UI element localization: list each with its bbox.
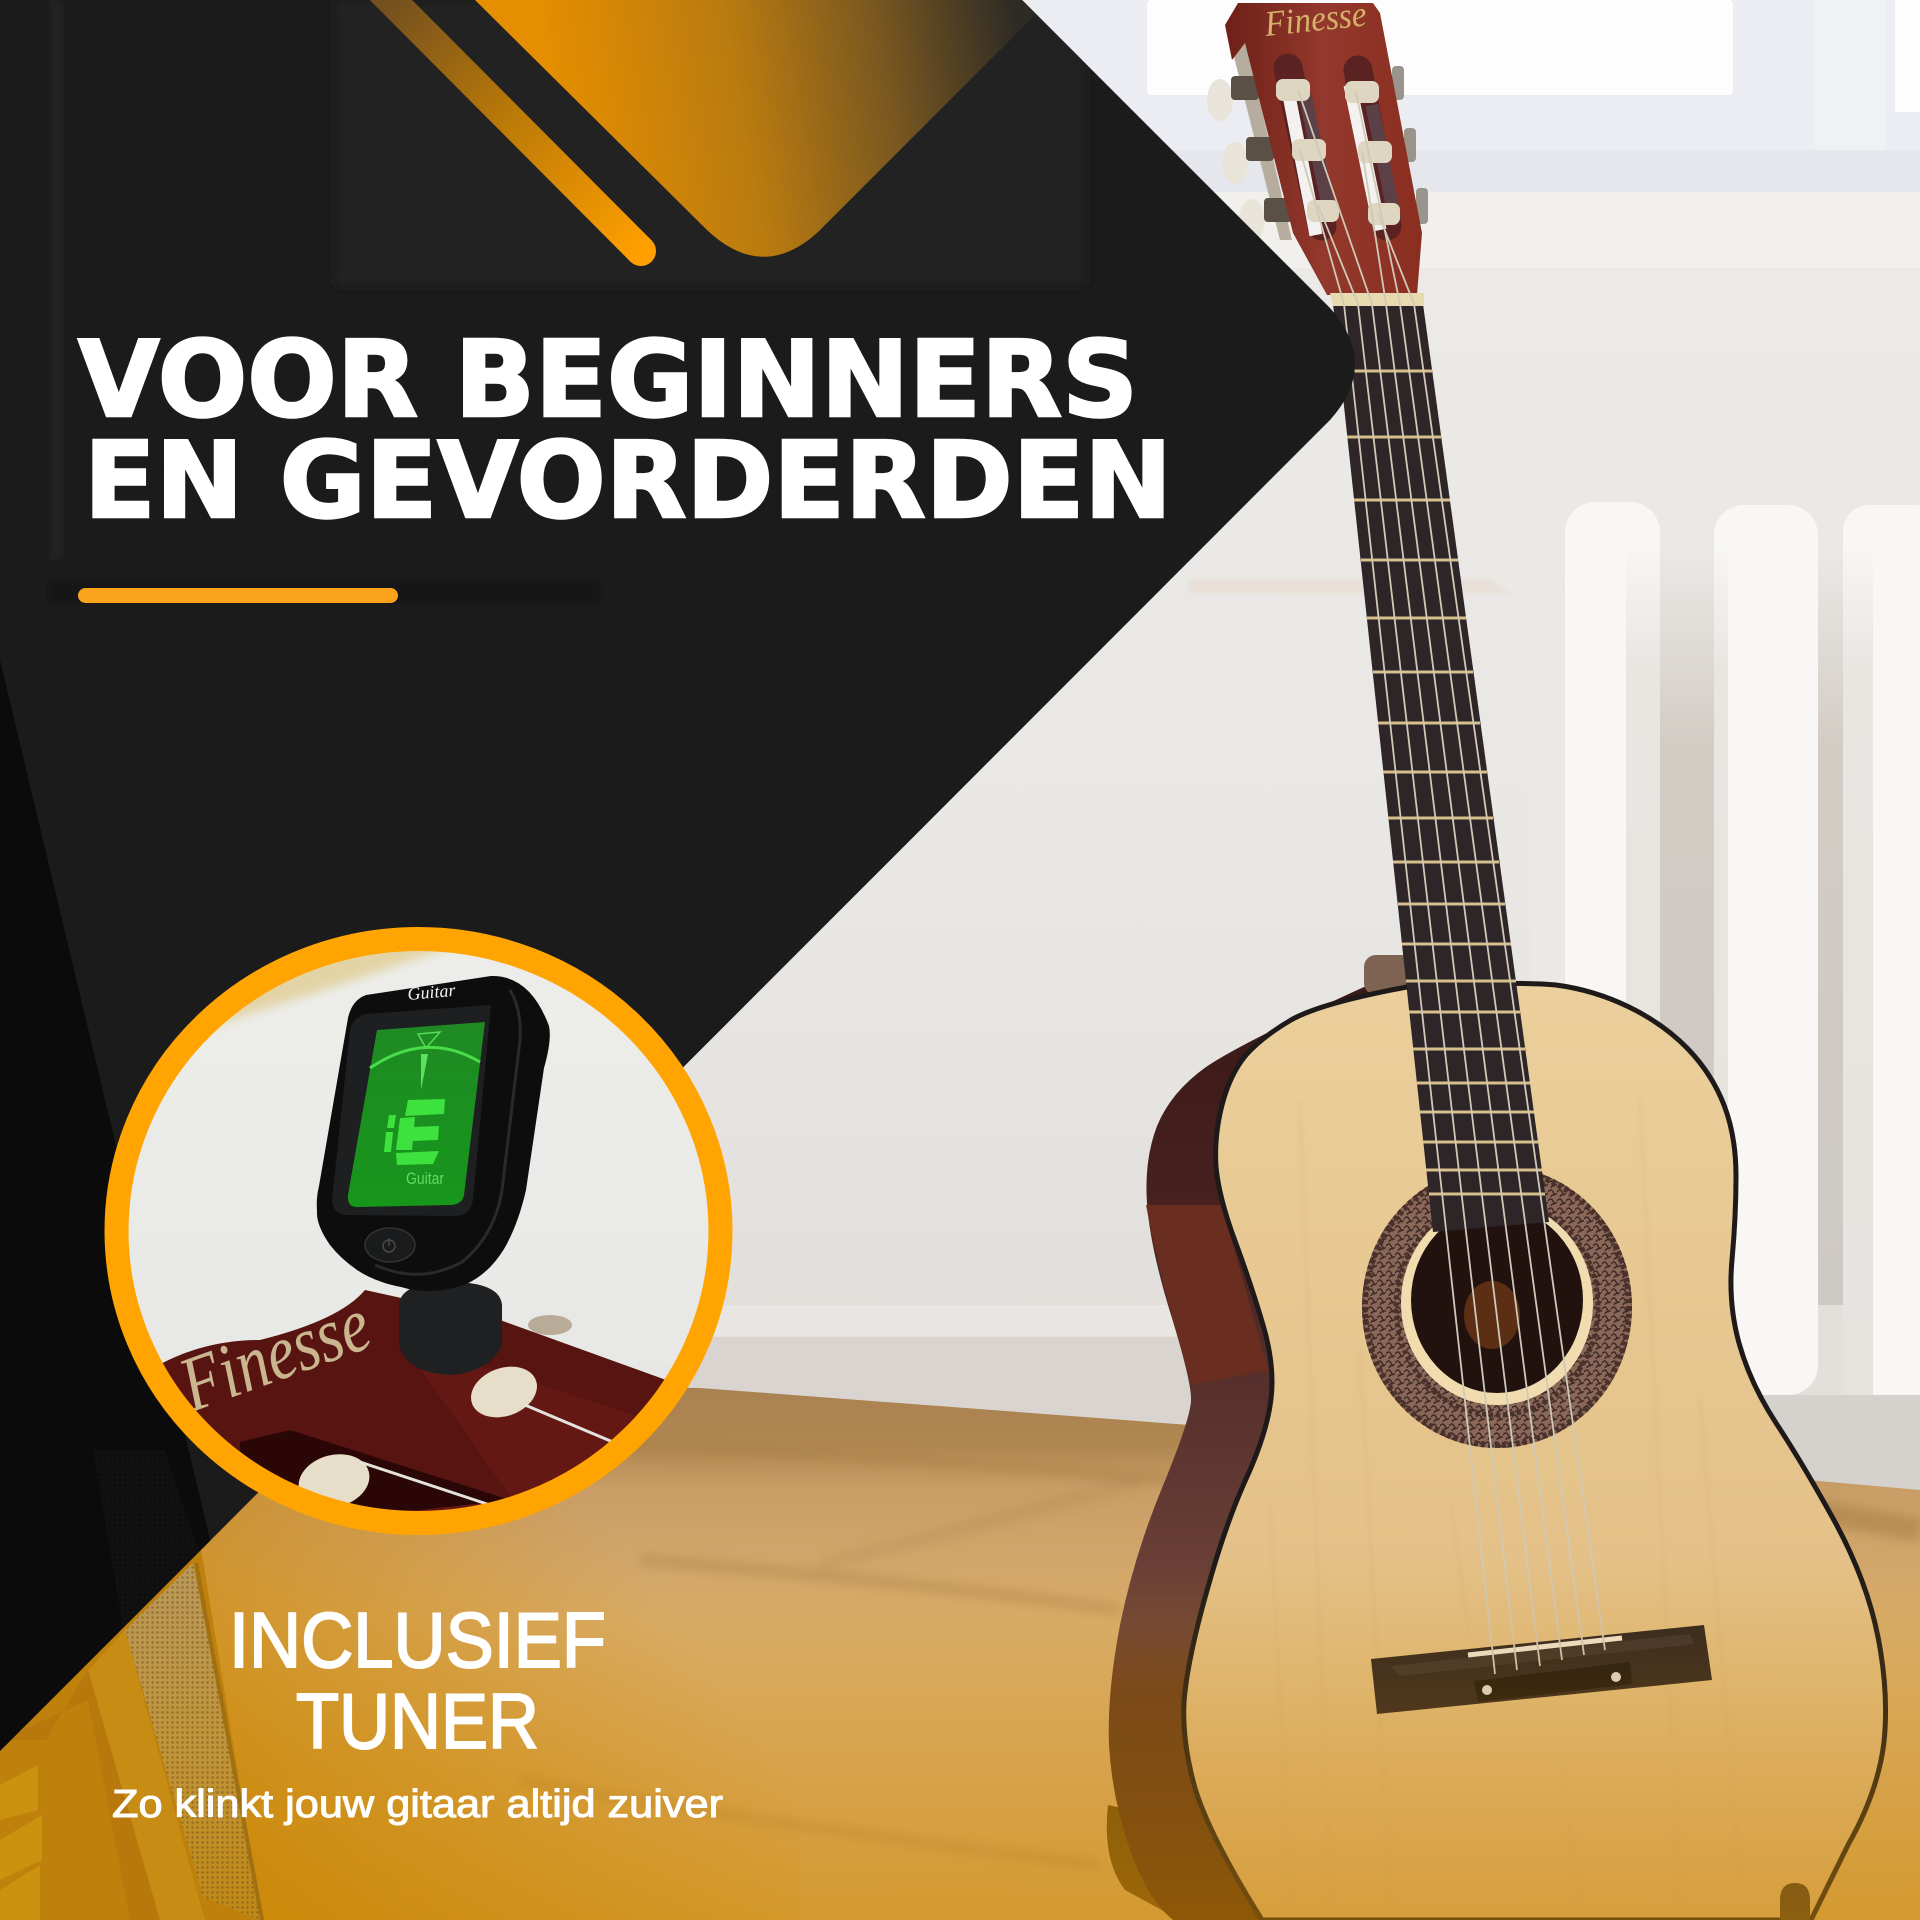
tuner note letter (384, 1099, 445, 1165)
tuner bezel (332, 1005, 491, 1216)
headstock (1207, 0, 1428, 295)
case dark orange body (0, 1500, 262, 1920)
heading (78, 319, 1172, 542)
mesh strip (125, 1563, 260, 1920)
nut (1330, 293, 1424, 306)
sound hole (1401, 1201, 1593, 1405)
power button (365, 1228, 415, 1262)
floor and body colour overlays (0, 1450, 1920, 1920)
tuner pegs (471, 1366, 537, 1418)
tuner heading: INCLUSIEF (229, 1596, 606, 1684)
tuner rollers (1276, 79, 1400, 225)
orange diagonal bar (371, 0, 641, 251)
guitar case at left edge (0, 1500, 262, 1920)
peg shaft (240, 1430, 505, 1511)
radiator (1480, 502, 1920, 1430)
wood grain (1270, 1100, 1740, 1910)
heading: VOOR BEGINNERS (78, 319, 1138, 441)
guitar side wood (1109, 985, 1420, 1920)
neck heel (1364, 955, 1414, 995)
tuner brand: Guitar (407, 980, 457, 1004)
wooden floor (0, 1380, 1920, 1920)
dark panel background textures (0, 0, 1085, 1770)
tuner circle photo (100, 920, 740, 1560)
orange ring (116, 939, 720, 1523)
circle photo content (128, 951, 708, 1511)
red headstock (162, 1290, 664, 1511)
guitar top face (1184, 983, 1886, 1920)
guitar stand peg (1780, 1883, 1810, 1920)
tuner edge highlight (375, 990, 520, 1274)
tuner heading (229, 1596, 606, 1765)
case lighter steps (0, 1765, 42, 1920)
tuner arc (370, 1047, 480, 1068)
window sill (1030, 192, 1920, 268)
wall (0, 0, 1920, 1500)
guitar (1107, 0, 1886, 1920)
radiator pipe (1188, 578, 1588, 594)
baseboard (640, 1305, 1920, 1500)
black guitar case strip (0, 660, 215, 1770)
logo on headstock: Finesse (167, 1280, 381, 1428)
tuner subtitle: Zo klinkt jouw gitaar altijd zuiver (112, 1783, 723, 1826)
dark panel (0, 0, 1355, 1770)
tuner buttons (1207, 79, 1265, 241)
guitar stand (1107, 1805, 1230, 1920)
heading: EN GEVORDERDEN (84, 420, 1172, 542)
fretboard (1333, 304, 1549, 1232)
orange diamond (475, 0, 1050, 257)
tuner metal plate (1228, 33, 1292, 240)
heading underline (78, 588, 398, 603)
tuner gears (1231, 76, 1292, 222)
beige background (215, 951, 449, 1032)
frets (1340, 371, 1545, 1194)
rosette (1362, 1166, 1632, 1448)
window frame (1030, 0, 1920, 192)
tuner housing (317, 976, 550, 1291)
headstock slots (1288, 68, 1387, 226)
strings (1298, 90, 1605, 1674)
tuner needle (421, 1054, 428, 1090)
headstock body (1225, 3, 1422, 295)
tuner heading: TUNER (296, 1677, 539, 1765)
floor streaks (520, 1445, 1920, 1865)
tuner screen label: Guitar (406, 1169, 444, 1188)
tuner screen (348, 1022, 485, 1207)
right tuners (1392, 66, 1428, 224)
tuner pivot (399, 1282, 502, 1375)
bridge (1371, 1625, 1712, 1714)
